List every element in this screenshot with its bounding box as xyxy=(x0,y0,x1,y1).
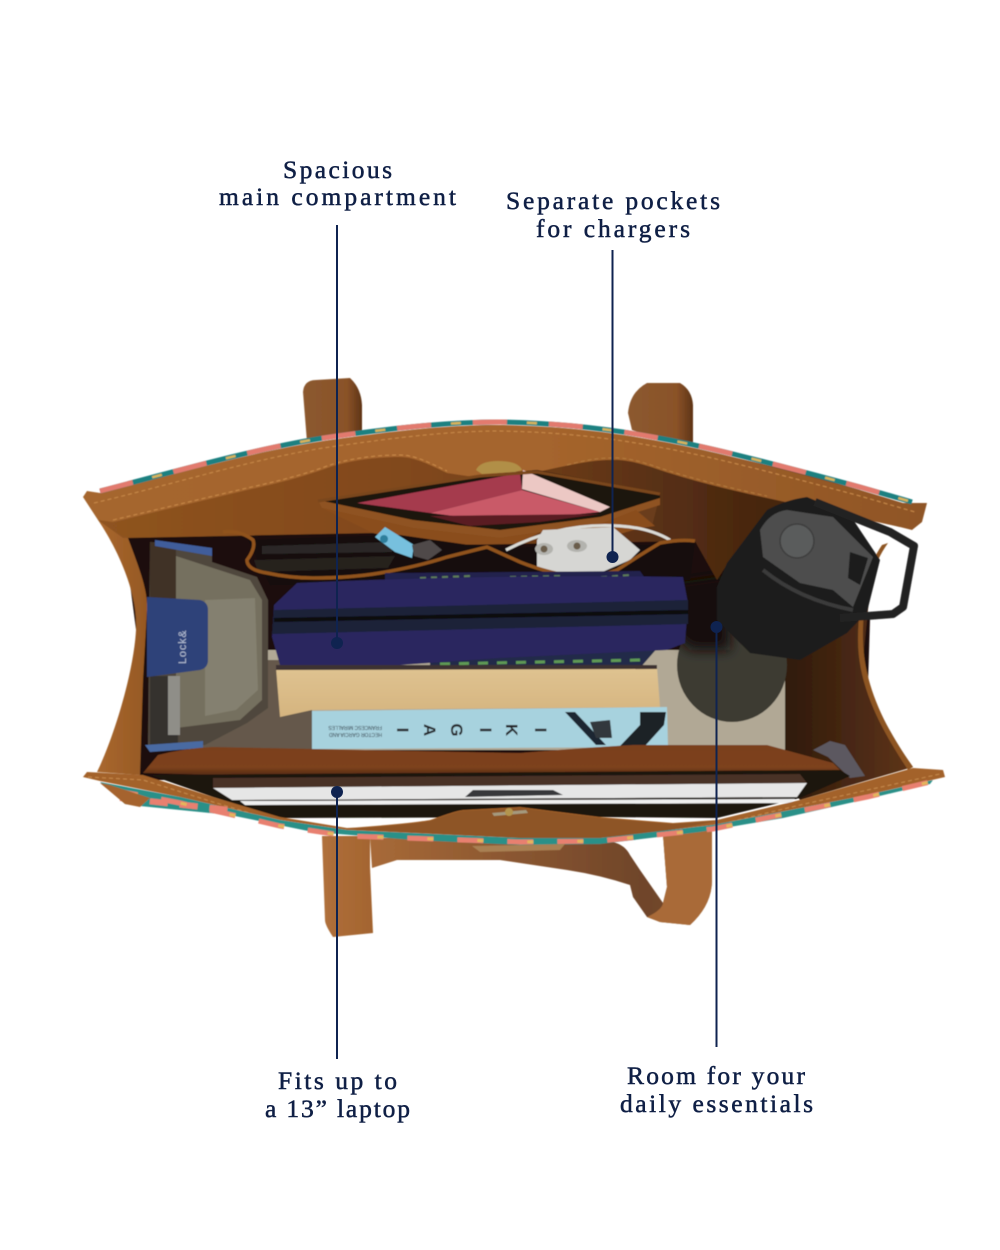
container lid tab xyxy=(147,597,208,677)
front leather rim xyxy=(83,768,945,845)
front handles xyxy=(322,830,712,937)
ikigai book: K xyxy=(502,724,521,737)
bag xyxy=(83,378,945,937)
ikigai book: HECTOR GARCIA AND xyxy=(329,731,382,737)
bottle cap xyxy=(760,510,873,607)
yellowed book xyxy=(276,665,660,717)
under lining band xyxy=(150,770,850,818)
label: essentials xyxy=(620,1061,813,1118)
ikigai book: G xyxy=(447,723,466,737)
ikigai book: FRANCESC MIRALLES xyxy=(328,724,382,730)
ikigai book: I xyxy=(476,728,495,732)
charger and pen area xyxy=(248,526,695,585)
back wall xyxy=(83,422,927,580)
front organizer pocket stitched edge xyxy=(223,532,695,578)
callout line: laptop xyxy=(331,786,343,1059)
label: laptop: a 13” laptop xyxy=(265,1094,410,1123)
left wall xyxy=(97,520,147,775)
label: laptop xyxy=(265,1066,410,1123)
right wall xyxy=(785,590,913,800)
callout line: charger pockets xyxy=(606,250,618,563)
food container: Lock& xyxy=(177,629,189,664)
ikigai book: I xyxy=(393,728,412,732)
back pattern band xyxy=(100,422,912,502)
food container xyxy=(145,540,268,752)
label: chargers: Separate pockets xyxy=(506,186,720,215)
icon: pen xyxy=(375,527,414,558)
icon: charger xyxy=(506,526,670,550)
lining roll xyxy=(143,745,840,777)
label: main compartment: Spacious xyxy=(283,155,392,184)
label: main compartment xyxy=(219,155,456,211)
ikigai book: I xyxy=(531,728,550,732)
interior xyxy=(123,520,870,780)
linen base xyxy=(260,650,790,750)
label: chargers: for chargers xyxy=(536,214,690,243)
front pattern band xyxy=(100,780,933,845)
label: essentials: Room for your xyxy=(627,1061,806,1090)
navy pencil case xyxy=(272,576,688,665)
label: main compartment: main compartment xyxy=(219,182,456,211)
floral strip behind pencil case xyxy=(385,571,650,585)
button xyxy=(476,461,522,474)
bottle base xyxy=(677,608,787,722)
ikigai book: A xyxy=(420,724,439,736)
gray tab xyxy=(813,741,865,778)
ikigai book xyxy=(312,707,668,749)
water bottle xyxy=(717,497,914,660)
bottle handle xyxy=(815,502,914,618)
back handles xyxy=(303,378,693,445)
label: chargers xyxy=(506,186,720,243)
callout line: essentials xyxy=(710,621,722,1047)
snap xyxy=(492,810,528,816)
laptop xyxy=(213,783,807,805)
label: laptop: Fits up to xyxy=(278,1066,397,1095)
tab near zip xyxy=(634,495,660,526)
shadow behind bottle xyxy=(660,575,730,650)
pocket lower flap xyxy=(322,508,655,545)
strap patch below rim xyxy=(472,844,565,852)
upper leather band xyxy=(83,425,927,530)
red notebook xyxy=(357,473,522,513)
zip pocket xyxy=(318,470,660,538)
callout line: main compartment xyxy=(331,225,343,649)
label: essentials: daily essentials xyxy=(620,1089,813,1118)
stitching xyxy=(94,431,915,512)
